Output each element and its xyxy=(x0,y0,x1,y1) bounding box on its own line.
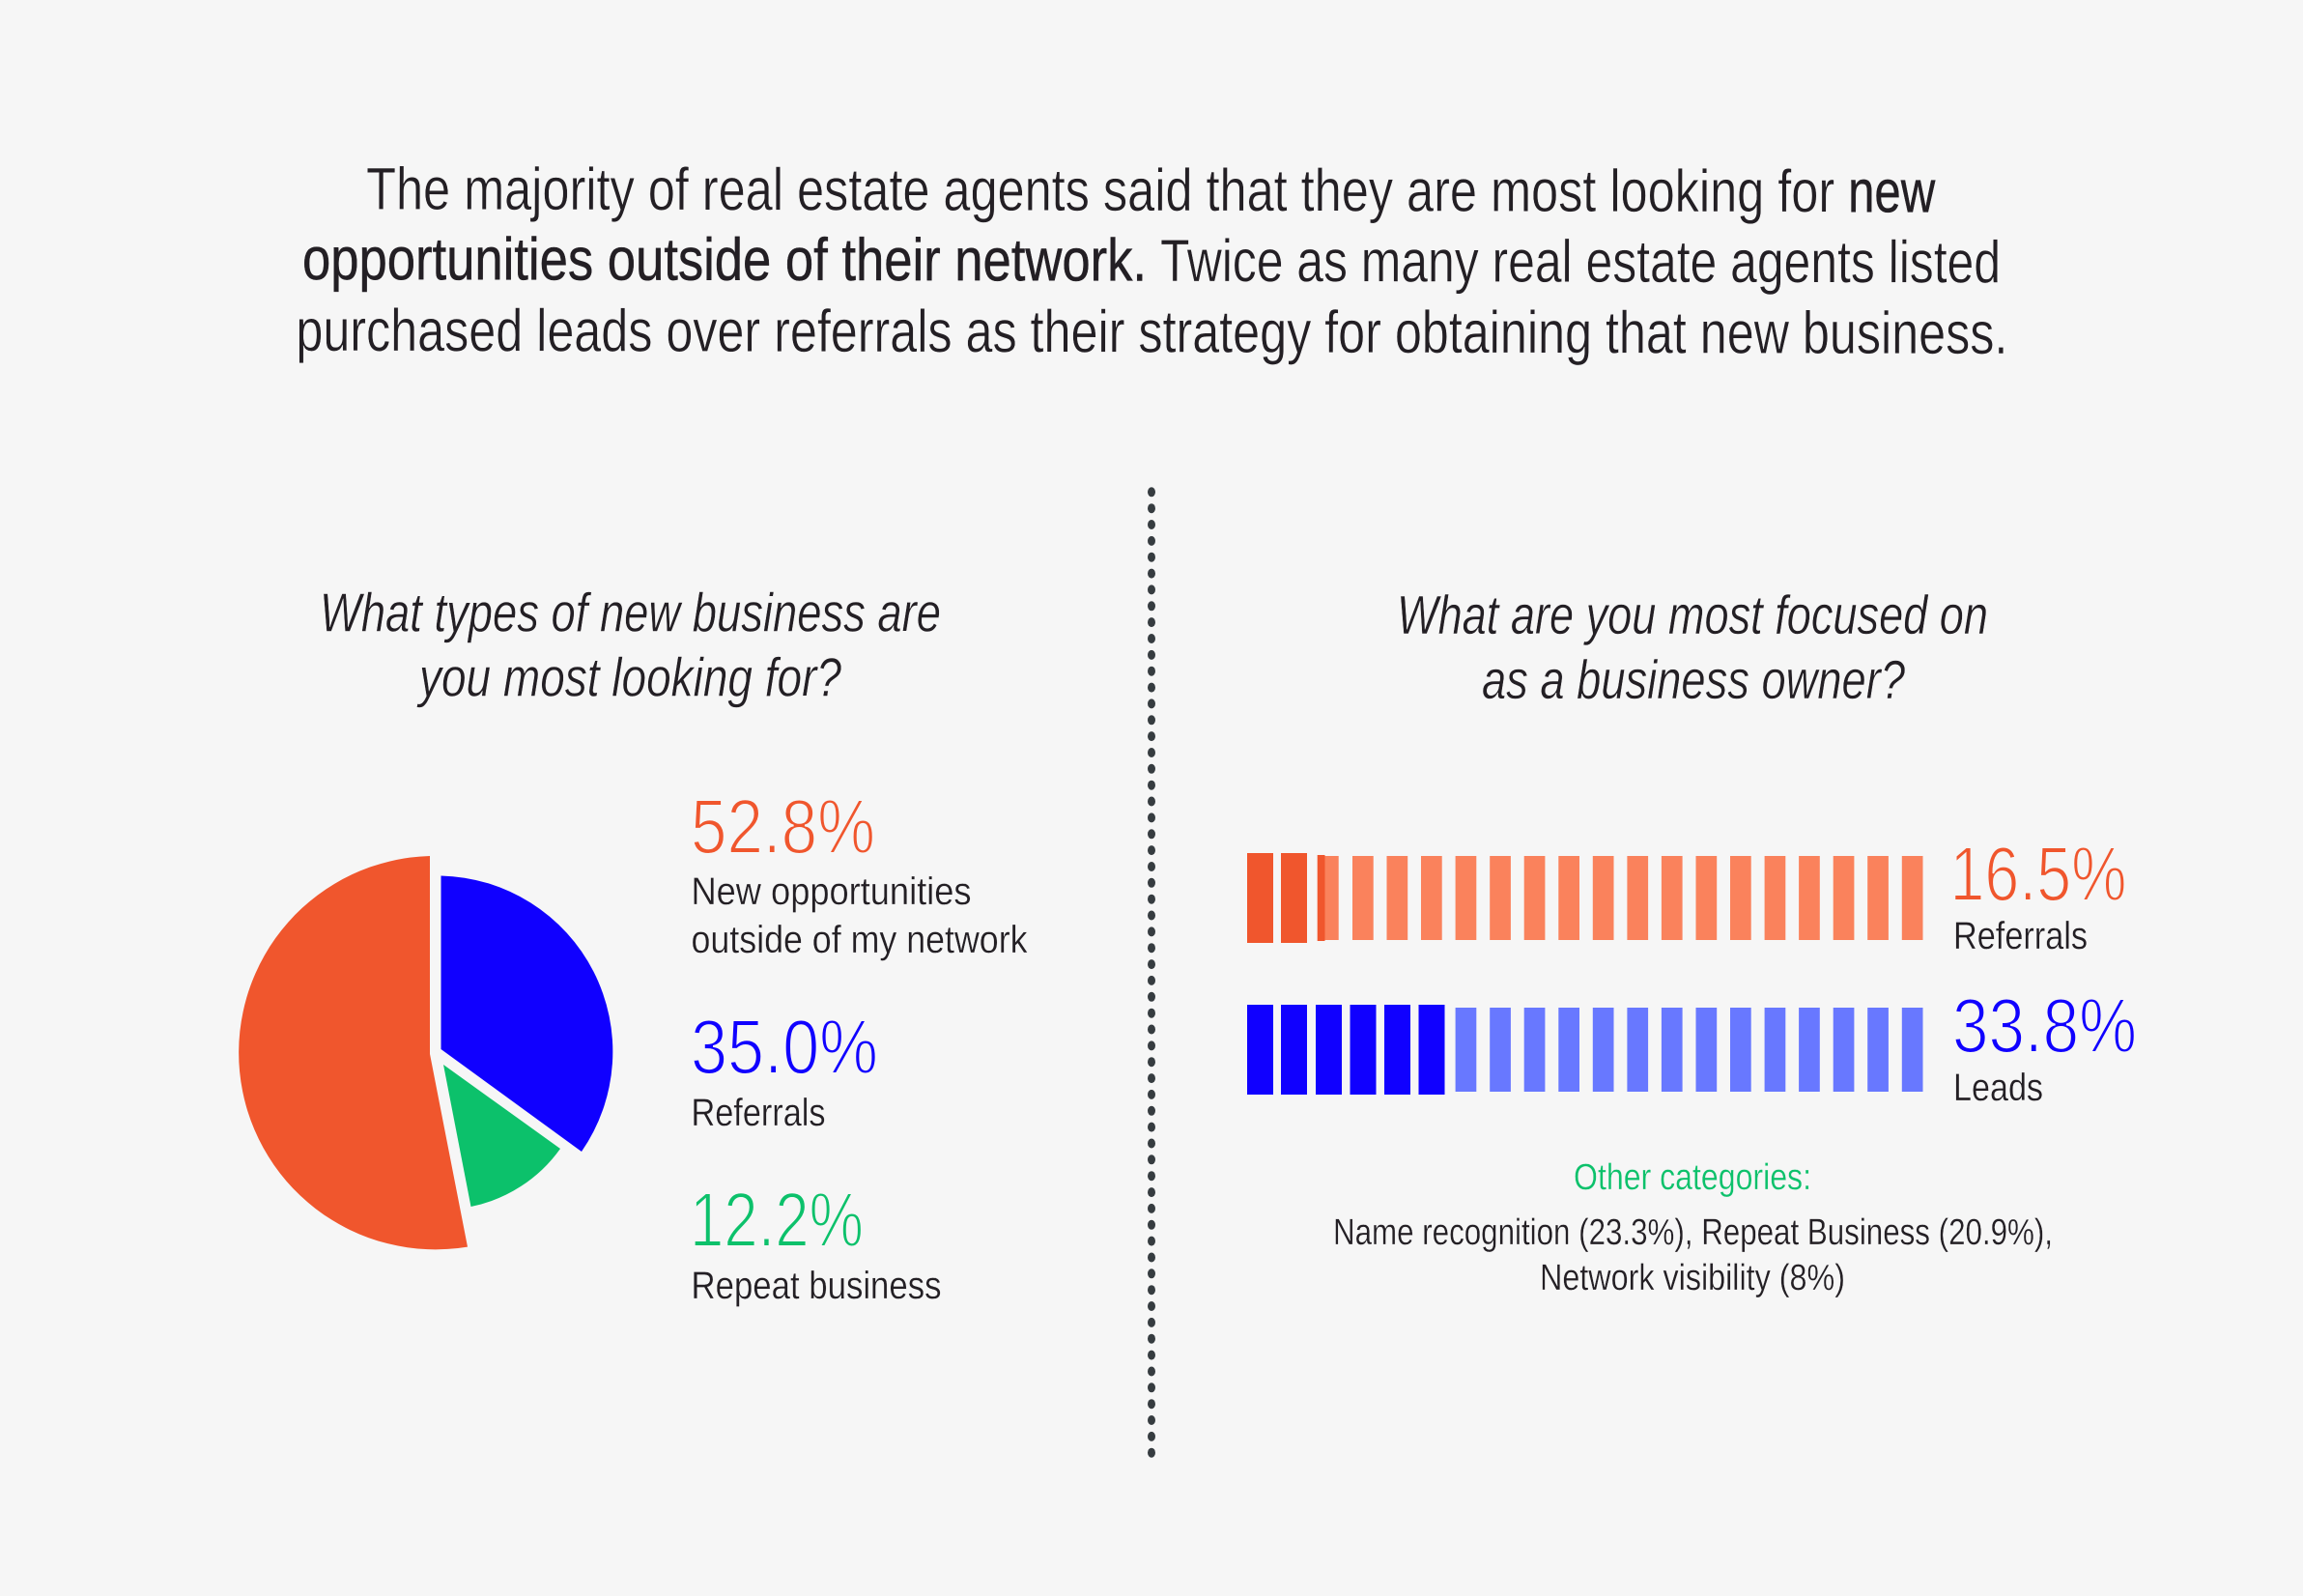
stat: 52.8% new opportunities: 52.8% xyxy=(691,784,875,869)
heading: what are you most focused on: What are you most focused on xyxy=(1397,584,1988,646)
title: intro paragraph: opportunities outside of their network. xyxy=(302,226,1147,294)
stat: 52.8% new opportunities: New opportunities xyxy=(692,870,972,913)
bar chart: referrals 16.5% xyxy=(1247,853,1922,943)
title: intro paragraph: Twice as many real estate agents listed xyxy=(1160,228,2001,297)
title: intro paragraph: new xyxy=(1848,158,1935,225)
stat: 35.0% referrals: Referrals xyxy=(692,1092,825,1134)
stat: 16.5% referrals xyxy=(1949,831,2127,957)
dotted divider xyxy=(1148,487,1155,1458)
heading: what types of new business: What types of new business are xyxy=(320,582,941,643)
stat: 52.8% new opportunities xyxy=(691,784,1028,961)
pie slice: referrals 35.0% xyxy=(441,875,612,1152)
heading: what are you most focused on: as a business owner? xyxy=(1482,649,1905,711)
title: intro paragraph xyxy=(296,156,2008,367)
stat: 12.2% repeat business: Repeat business xyxy=(692,1265,941,1307)
pie chart xyxy=(239,856,612,1249)
other categories note: Other categories: xyxy=(1574,1157,1811,1198)
stat: 33.8% leads: 33.8% xyxy=(1952,983,2137,1069)
stat: 16.5% referrals: 16.5% xyxy=(1949,831,2127,917)
other categories note: Name recognition (23.3%), Repeat Business (20.9%), xyxy=(1333,1212,2053,1253)
stat: 33.8% leads xyxy=(1952,983,2137,1109)
panel: new business types xyxy=(239,582,1028,1307)
panel: business owner focus xyxy=(1247,584,2137,1298)
stat: 12.2% repeat business xyxy=(690,1177,941,1307)
other categories note xyxy=(1333,1157,2053,1298)
heading: what types of new business xyxy=(320,582,941,709)
stat: 33.8% leads: Leads xyxy=(1953,1067,2043,1109)
stat: 52.8% new opportunities: outside of my network xyxy=(692,919,1028,961)
pie slice: new opportunities 52.8% xyxy=(239,856,468,1249)
stat: 12.2% repeat business: 12.2% xyxy=(690,1177,864,1263)
other categories note: Network visibility (8%) xyxy=(1540,1258,1845,1298)
stat: 16.5% referrals: Referrals xyxy=(1953,915,2088,957)
pie slice: repeat business 12.2% xyxy=(443,1065,560,1207)
heading: what are you most focused on xyxy=(1397,584,1988,711)
title: intro paragraph: The majority of real estate agents said that they are most looking for xyxy=(366,157,1834,225)
heading: what types of new business: you most looking for? xyxy=(416,647,841,709)
stat: 35.0% referrals: 35.0% xyxy=(691,1004,878,1090)
stat: 35.0% referrals xyxy=(691,1004,878,1134)
bar chart: leads 33.8% xyxy=(1247,1005,1922,1095)
